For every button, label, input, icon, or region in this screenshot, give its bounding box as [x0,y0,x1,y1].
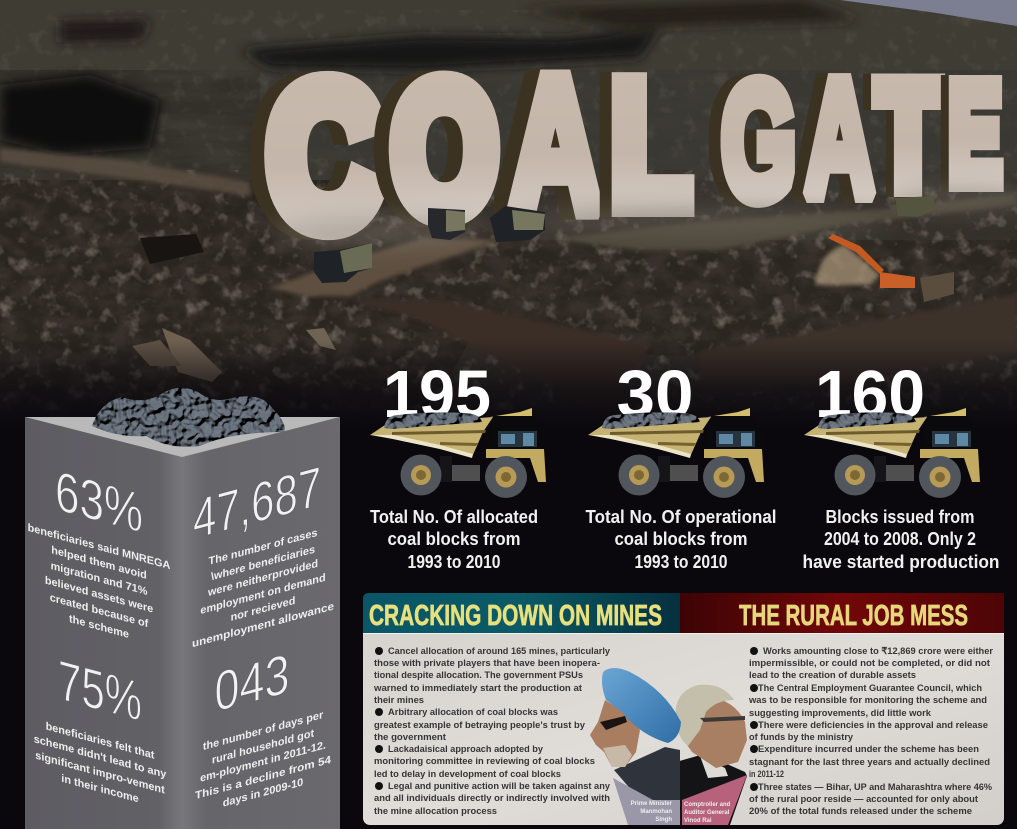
description: The number of cases [209,527,317,568]
description: employment on demand [200,572,326,617]
truck: turning [490,206,545,242]
caption: allocated blocks [370,507,538,572]
caption: Comptroller and Auditor General: Auditor General [684,810,730,816]
text: rural job mess bullets: Three states — Bihar, UP and Maharashtra where 46% [758,781,993,792]
description: rural household got [212,727,314,767]
description: beneficiaries said MNREGA [28,522,170,572]
caption: allocated blocks: Total No. Of allocated [370,507,538,527]
caption: blocks issued: have started production [802,552,1000,572]
caption: Prime Minister [613,778,680,825]
text: cracking down bullets: tional despite allocation. The government PSUs [374,669,583,680]
truck: center [428,208,465,240]
stat: 043 [195,631,332,817]
number: 30: 30 [616,357,694,432]
portrait: Manmohan Singh [590,668,681,825]
icon: dump truck 1 [370,408,546,498]
truck: foreground [314,243,372,283]
text: cracking down bullets: led to delay in development of coal blocks [374,768,561,779]
description [192,523,334,650]
description: helped them avoid [51,544,147,582]
letter T: T [877,52,940,220]
letter C: C [268,43,381,269]
letter O: O [392,44,497,254]
panel: cracking down and rural job mess [363,593,1004,825]
icon: dump truck 2 [588,408,764,498]
caption: operational blocks: coal blocks from [614,529,748,549]
description: \where beneficiaries [211,544,315,583]
caption: Comptroller and Auditor General: Comptroller and [684,802,731,808]
text: cracking down bullets: Arbitrary allocation of coal blocks was [388,706,558,717]
text: cracking down bullets: monitoring committee in reviewing of coal blocks [374,755,595,766]
caption: Prime Minister: Prime Minister [631,801,673,807]
stat: 75% [34,642,167,813]
stat: 47,687 [192,451,334,650]
caption: blocks issued: 2004 to 2008. Only 2 [824,529,976,549]
text: rural job mess bullets: lead to the creation of durable assets [749,669,916,680]
truck: far [895,196,934,217]
stat: 63%: 63% [55,459,143,546]
stat: 47,687: 47,687 [193,455,321,552]
stat: 63% [28,452,170,652]
caption: blocks issued: Blocks issued from [826,507,974,527]
title: COALGATE 3D letters [268,37,1002,269]
mine trucks and excavator in photo [314,196,954,302]
coal pile on top of column [25,388,340,829]
description: the number of days per [203,709,324,753]
text: rural job mess bullets: There were deficiencies in the approval and release [758,719,988,730]
caption: operational blocks: Total No. Of operational [586,507,776,527]
column: three-sided stat pillar [25,417,340,829]
text: rural job mess bullets: stagnant for the last three years and actually declined [749,756,990,767]
description [195,707,332,817]
description: days in 2009-10 [223,776,303,810]
description: migration and 71% [51,560,148,598]
description: unemployment allowance [192,601,334,650]
text: rural job mess bullets: of funds by the ministry [749,731,854,742]
text: rural job mess bullets: suggesting improvements, did little work [749,707,932,718]
text: rural job mess bullets: The Central Employment Guarantee Council, which [758,682,982,693]
description [34,717,167,813]
letter A: A [509,37,602,252]
number: 195: 195 [383,357,491,432]
text: cracking down bullets: Lackadaisical approach adopted by [388,743,544,754]
letter E: E [949,53,1002,214]
text: rural job mess bullets [748,645,993,816]
rock slabs [132,234,336,382]
description: in their income [61,773,139,805]
text: cracking down bullets: the government [374,731,446,742]
caption: Prime Minister: Manmohan [640,809,672,815]
caption: operational blocks: 1993 to 2010 [634,552,728,572]
description: nor recieved [231,595,296,624]
caption: operational blocks [586,507,776,572]
caption: allocated blocks: 1993 to 2010 [408,552,500,572]
caption: allocated blocks: coal blocks from [388,529,520,549]
icon: dump truck 3 [804,408,980,498]
header: cracking down on mines [363,593,680,633]
description: believed assets were [45,575,153,616]
text: rural job mess bullets: was to be responsible for monitoring the scheme and [748,694,987,705]
letter A second: A [804,44,875,231]
text: rural job mess bullets: impermissible, or could not be completed, or did not [749,657,990,668]
text: cracking down bullets: warned to immediately start the production at [373,682,582,693]
description: beneficiaries felt that [46,720,155,762]
letter L: L [612,45,690,243]
number: 160: 160 [815,357,925,432]
header: cracking down on mines: CRACKING DOWN ON MINES [369,600,662,632]
text: rural job mess bullets: in 2011-12 [749,768,784,779]
description: created because of [50,592,149,630]
letter G: G [721,47,796,234]
description [28,522,170,652]
text: rural job mess bullets: Works amounting close to ₹12,869 crore were either [763,645,993,656]
text: cracking down bullets [373,645,611,816]
caption: Comptroller and Auditor General: Vinod Rai [684,818,712,824]
text: rural job mess bullets: of the rural poor reside — accounted for only about [749,793,978,804]
text: cracking down bullets: Legal and punitive action will be taken against any [388,780,611,791]
text: cracking down bullets: Cancel allocation of around 165 mines, particularly [388,645,611,656]
description: were neitherprovided [207,558,318,599]
description: the scheme [69,613,129,641]
stat: 043: 043 [214,642,290,725]
caption: Comptroller and Auditor General [682,775,747,825]
description: This is a decline from 54 [195,754,332,802]
coal rocks [92,388,285,447]
text: cracking down bullets: and all individuals directly or indirectly involved with [374,792,610,803]
stat: 75%: 75% [58,649,142,734]
text: cracking down bullets: the mine allocation process [374,805,497,816]
text: rural job mess bullets: 20% of the total funds released under the scheme [749,805,972,816]
description: scheme didn't lead to any [34,733,167,781]
header: the rural job mess [680,593,1004,633]
caption: Prime Minister: Singh [655,817,672,823]
text: cracking down bullets: greatest example of betraying people's trust by [374,719,586,730]
description: em-ployment in 2011-12. [200,739,326,785]
description: significant impro-vement [35,750,165,796]
text: cracking down bullets: their mines [374,694,424,705]
portrait: Vinod Rai [672,685,747,825]
excavator and dust [815,234,954,302]
caption: blocks issued [802,507,1000,572]
dust haze in front of title [270,190,1017,246]
text: cracking down bullets: those with private players that have been inopera- [374,657,600,668]
text: rural job mess bullets: Expenditure incurred under the scheme has been [758,743,979,754]
